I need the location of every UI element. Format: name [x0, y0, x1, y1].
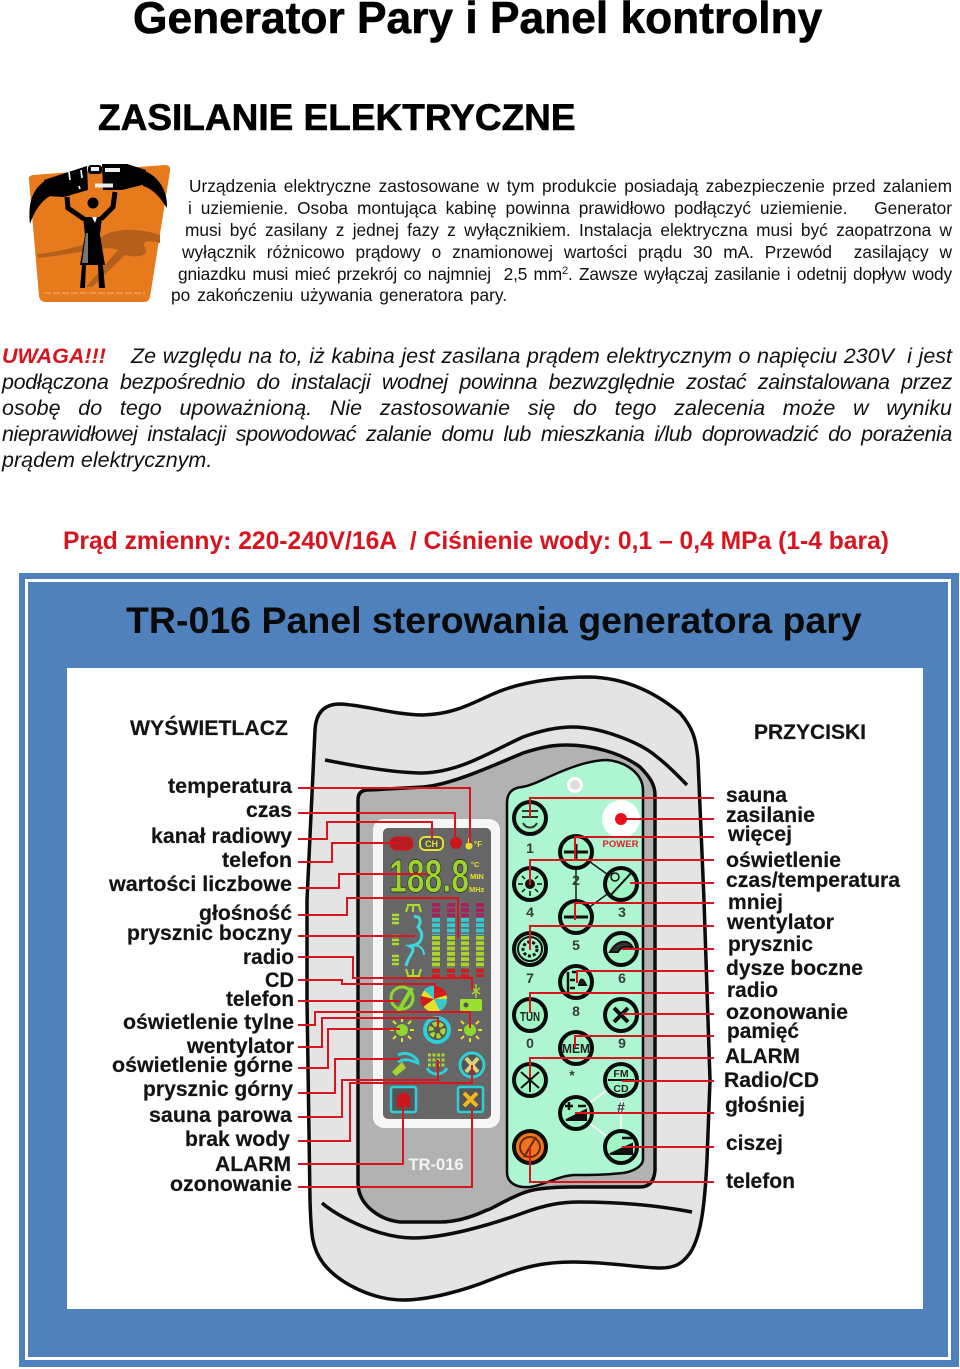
button labels: ALARM [725, 1045, 800, 1068]
red leader lines: buttons [530, 798, 714, 1182]
key captions: * [569, 1067, 575, 1083]
button labels: mniej [728, 891, 783, 914]
button labels [724, 721, 900, 1193]
display labels: temperatura [168, 775, 292, 798]
display units: MIN [470, 872, 484, 881]
warning text block: prądem elektrycznym. [2, 448, 212, 472]
key captions: 9 [618, 1035, 626, 1051]
key captions: 5 [572, 937, 580, 953]
level bars [436, 903, 480, 977]
display frame and screen [373, 819, 500, 1128]
display labels: czas [246, 799, 292, 822]
display labels: głośność [199, 902, 292, 925]
power and water pressure heading: Prąd zmienny: 220-240V/16A / Ciśnienie wody: 0,1 – 0,4 MPa (1-4 bara) [63, 527, 889, 555]
text block: electrical requirements: Urządzenia elektryczne zastosowane w tym produkcie posiadają zabezpieczenie przed zalaniem [189, 176, 952, 196]
text block: electrical requirements: musi być zasilany z jednej fazy z wyłącznikiem. Instalacja elektryczna musi być zaopatrzona w [185, 220, 952, 240]
key captions: TUN [520, 1009, 540, 1024]
button labels: telefon [726, 1170, 795, 1193]
function icons row: showers and sauna [392, 1053, 484, 1077]
power key: POWER [603, 839, 639, 850]
display status icons: °F [474, 840, 482, 849]
key captions: FM [613, 1068, 629, 1080]
key captions [520, 840, 629, 1115]
red leader lines: display [298, 788, 472, 1187]
display labels: wartości liczbowe [108, 873, 292, 896]
key captions: 1 [526, 840, 534, 856]
button labels: PRZYCISKI [754, 721, 866, 744]
display labels: WYŚWIETLACZ [130, 716, 288, 740]
display labels [108, 716, 294, 1196]
power key [568, 778, 640, 850]
warning text block: osobę do tego upoważnioną. Nie zastosowanie się do tego zalecenia może w wyniku [2, 396, 952, 420]
display units: °C [471, 860, 480, 869]
button labels: ciszej [726, 1132, 783, 1155]
button labels: pamięć [727, 1020, 799, 1043]
key captions: 6 [618, 970, 626, 986]
button labels: sauna [726, 784, 787, 807]
display labels: sauna parowa [149, 1104, 292, 1127]
display labels: oświetlenie górne [112, 1054, 293, 1077]
warning text block [2, 344, 953, 472]
text block: electrical requirements: i uziemienie. Osoba montująca kabinę powinna prawidłowo podłączyć uziemienie. Generator [188, 198, 952, 218]
warning text block: podłączona bezpośrednio do instalacji wodnej powinna bezwzględnie zostać zainstalowana przez [2, 370, 952, 394]
keypad buttons [514, 802, 637, 1163]
device body [307, 677, 710, 1300]
display units [469, 860, 485, 894]
bather figure and side jets [392, 905, 424, 976]
model label: TR-016 [408, 1156, 464, 1174]
function icons row: shower, ventilation, radio [391, 984, 482, 1012]
text block: electrical requirements: po zakończeniu używania generatora pary. [171, 285, 507, 305]
warning text block: nieprawidłowej instalacji spowodować zalanie domu lub mieszkania i/lub doprowadzić do porażenia [2, 422, 952, 446]
display labels: wentylator [186, 1035, 294, 1058]
display labels: ozonowanie [170, 1173, 292, 1196]
button labels: prysznic [728, 933, 813, 956]
key captions: 4 [526, 904, 534, 920]
panel: blue control panel frame [19, 573, 959, 1367]
display labels: kanał radiowy [151, 825, 292, 848]
display status icons [390, 837, 482, 850]
key captions: CD [613, 1083, 629, 1095]
display labels: telefon [222, 849, 292, 872]
button labels: oświetlenie [726, 849, 841, 872]
heading: zasilanie elektryczne: ZASILANIE ELEKTRYCZNE [98, 97, 576, 138]
display status icons: CH [425, 839, 438, 849]
panel heading: TR-016 Panel sterowania generatora pary [126, 599, 862, 641]
diagram: control panel [67, 668, 923, 1309]
button labels: ozonowanie [726, 1001, 848, 1024]
button labels: głośniej [725, 1094, 805, 1117]
button labels: zasilanie [726, 804, 815, 827]
volume connectors [576, 1080, 621, 1147]
key captions: 7 [526, 970, 534, 986]
display labels: prysznic boczny [127, 922, 292, 945]
icon: woman joining two plugs [28, 164, 170, 302]
key connectors [576, 852, 621, 917]
warning text block: UWAGA!!! [2, 344, 106, 368]
key captions: MEM [562, 1041, 590, 1056]
key captions: 3 [618, 904, 626, 920]
key glyphs [518, 811, 634, 1157]
button labels: więcej [727, 823, 792, 846]
display labels: radio [243, 946, 294, 969]
display labels: brak wody [185, 1128, 290, 1151]
button labels: czas/temperatura [726, 869, 900, 892]
display units: MHz [469, 885, 485, 894]
text block: electrical requirements: gniazdku musi mieć przekrój co najmniej 2,5 mm2. Zawsze wyłączaj zasilanie i odetnij dopływ wody [178, 264, 952, 284]
button labels: wentylator [726, 911, 834, 934]
function icons row: lights and fan [390, 1018, 482, 1042]
alarm and no-water indicators [391, 1087, 483, 1112]
display labels: ALARM [215, 1153, 291, 1176]
key captions: 2 [572, 872, 580, 888]
display labels: telefon [226, 988, 294, 1011]
button labels: Radio/CD [724, 1069, 819, 1092]
button panel [507, 760, 643, 1187]
text block: electrical requirements: wyłącznik różnicowo prądowy o znamionowej wartości prądu 30 mA. Przewód zasilający w [182, 242, 952, 262]
key captions: 8 [572, 1003, 580, 1019]
display labels: CD [265, 969, 294, 992]
display labels: oświetlenie tylne [123, 1011, 294, 1034]
key captions: 0 [526, 1035, 534, 1051]
button labels: radio [727, 979, 778, 1002]
button labels: dysze boczne [726, 957, 863, 980]
display labels: prysznic górny [143, 1078, 293, 1101]
numeric readout: 188.8 [389, 850, 469, 902]
warning text block: Ze względu na to, iż kabina jest zasilana prądem elektrycznym o napięciu 230V i jest [131, 344, 952, 368]
text block: electrical requirements [171, 176, 952, 305]
key captions: # [617, 1099, 625, 1115]
